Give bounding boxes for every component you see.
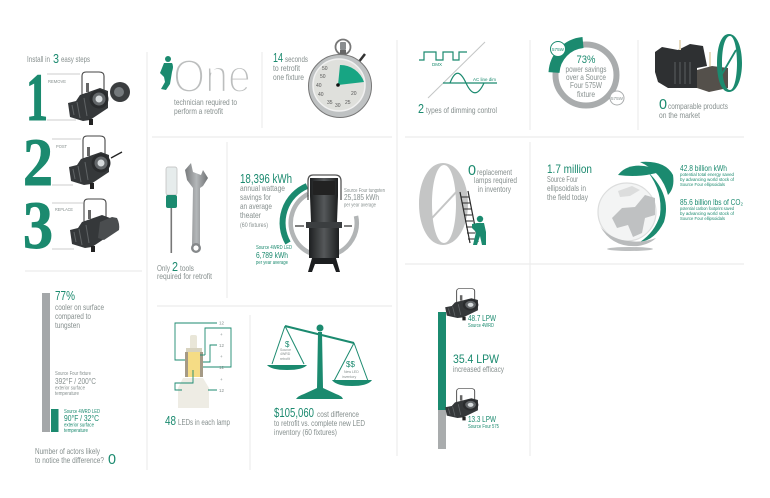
panel: 48 LEDs [165, 320, 231, 428]
text: number of actors: 0 [108, 451, 116, 468]
text: 0 comparable: on the market [659, 110, 700, 120]
text: 73 percent: power savings [566, 64, 606, 74]
chart: dimming waves: AC line dim [473, 77, 496, 82]
panel: surface temperature [35, 288, 116, 468]
text: 18,396 kWh: theater [240, 210, 261, 220]
text: LED usage: 6,789 kWh [256, 250, 288, 260]
text: 1.7 million: 1.7 million [547, 162, 592, 176]
text: 13.3 LPW [468, 414, 499, 430]
text: 105,060 [274, 405, 365, 437]
text: 1.7 million: the field today [547, 192, 589, 202]
icon: stopwatch: 40 [318, 92, 324, 98]
text: carbon saved [680, 197, 743, 221]
icon: ladder and worker [460, 191, 486, 245]
step 3 replace: 3 [23, 187, 53, 263]
heading: install in 3 easy steps: easy steps [61, 54, 90, 64]
text: 77 percent cooler: 77% [55, 288, 75, 303]
icon: globe with leaves [598, 162, 673, 251]
text: carbon saved: 85.6 billion lbs of CO₂ [680, 197, 743, 207]
image: lower fixture [445, 389, 478, 420]
icon: balance scale: 4WRD [280, 352, 291, 356]
text: energy saved: 42.8 billion kWh [680, 163, 727, 173]
icon: green slashed zero [717, 34, 742, 92]
text: 73 percent: over a Source [566, 72, 606, 82]
diagram: LED lamp wiring: 12 [219, 343, 225, 348]
text: 0 replacement [468, 162, 517, 194]
image: upper fixture [445, 289, 478, 320]
text: LED usage: per year average [256, 260, 288, 266]
text: LED usage: Source 4WRD LED [256, 245, 292, 251]
chart: power ring: 575W [611, 96, 624, 101]
text: 14 seconds: 14 [273, 50, 283, 65]
text: 0 replacement: replacement [477, 167, 512, 177]
icon: stopwatch: 50 [322, 66, 328, 72]
text: carbon saved: potential carbon footprint saved [680, 206, 734, 211]
text: number of actors: Number of actors likely [35, 446, 101, 456]
text: 2 types: types of dimming control [426, 105, 497, 115]
panel: two tools [157, 163, 212, 281]
step 2 post [23, 124, 122, 200]
heading: install in 3 easy steps: Install in [27, 54, 50, 64]
icon: balance scale: $ [285, 340, 290, 349]
text: 14 seconds: to retrofit [273, 63, 301, 73]
text: only 2 tools: required for retrofit [157, 271, 212, 281]
diagram: LED lamp wiring: + [220, 377, 223, 382]
text: 1.7 million [547, 162, 592, 202]
image: fixture rear view [295, 175, 352, 272]
text: Source Four temperature: exterior surface [55, 386, 85, 392]
text: 1.7 million: ellipsoidals in [547, 183, 586, 193]
panel: efficacy [438, 289, 505, 449]
step 1 remove: REMOVE [48, 79, 66, 84]
icon: balance scale: Source [280, 348, 291, 352]
text: tungsten usage: Source Four tungsten [344, 188, 385, 194]
image: LED modules [655, 40, 728, 92]
text: 0 comparable: comparable products [668, 101, 728, 111]
text: energy saved [680, 163, 735, 187]
text: Source 4WRD temperature: Source 4WRD LED [64, 409, 100, 415]
chart: dimming waves: DMX [432, 62, 442, 67]
text: Source Four temperature: Source Four fixture [55, 371, 91, 377]
bar chart: LPW bar [438, 312, 446, 449]
icon: stopwatch: 50 [320, 74, 326, 80]
text: 105,060: to retrofit vs. complete new LED [274, 418, 365, 428]
icon: gray slashed zero [419, 163, 468, 245]
diagram: LED lamp wiring: 12 [219, 388, 225, 393]
text: 18,396 kWh [240, 171, 292, 229]
diagram: LED lamp wiring: 12 [219, 320, 225, 326]
text: 73 percent: fixture [577, 89, 595, 99]
text: technician required [174, 97, 237, 116]
icon: stopwatch: 40 [316, 83, 322, 89]
text: technician required: technician required to [174, 97, 237, 107]
text: 18,396 kWh: an average [240, 201, 272, 211]
chart: power ring: 575W [552, 47, 565, 52]
step 1 remove [26, 59, 130, 135]
text: energy saved: by advancing world stock of [680, 177, 735, 182]
text: only 2 tools [157, 259, 212, 281]
text: Source Four temperature: 392°F / 200°C [55, 377, 96, 386]
text: 13.3 LPW: Source Four 575 [468, 424, 499, 430]
panel: one technician [160, 50, 251, 116]
icon: balance scale: $$ [346, 360, 355, 369]
text: 14 seconds [273, 50, 308, 82]
text: Source 4WRD temperature: temperature [64, 428, 88, 434]
text: 0 comparable: 0 [659, 96, 667, 113]
text: 48.7 LPW [468, 313, 496, 329]
text: tungsten usage: per year average [344, 202, 376, 208]
diagram: LED lamp wiring [175, 320, 231, 408]
icon: technician figure [160, 56, 173, 90]
icon: balance scale: New LED [344, 370, 359, 374]
text: 2 types [418, 101, 497, 116]
icon: stopwatch: 25 [345, 100, 351, 106]
heading: install in 3 easy steps [27, 51, 90, 66]
text: 0 replacement: lamps required [474, 175, 517, 185]
text: 77 percent cooler: tungsten [55, 320, 80, 330]
text: energy saved: potential total energy saved [680, 172, 734, 177]
diagram: LED lamp wiring: 12 [219, 365, 225, 370]
text: 77 percent cooler [55, 288, 104, 330]
step 3 replace: REPLACE [55, 207, 73, 212]
icon: balance scale: inventory [342, 375, 356, 379]
panel: annual wattage savings [240, 171, 385, 272]
text: Source 4WRD temperature: 90°F / 32°C [64, 413, 99, 423]
big word One: One [173, 50, 251, 102]
panel: ellipsoidals in field [547, 162, 743, 251]
step 3 replace [23, 187, 119, 263]
icon: balance scale [267, 324, 372, 399]
panel: replacement lamps [419, 162, 517, 245]
text: 2 types: 2 [418, 101, 424, 116]
icon: stopwatch [308, 40, 372, 118]
text: 18,396 kWh: annual wattage [240, 183, 285, 193]
panel: cost difference [267, 324, 372, 437]
text: 105,060: inventory (60 fixtures) [274, 427, 337, 437]
text: technician required: perform a retrofit [174, 106, 223, 116]
text: carbon saved: by advancing world stock of [680, 211, 735, 216]
text: tungsten usage: 25,185 kWh [344, 193, 379, 202]
icon: stopwatch: 30 [335, 103, 341, 109]
text: 18,396 kWh: 18,396 kWh [240, 171, 292, 186]
diagram: LED lamp wiring: + [220, 354, 223, 359]
heading: install in 3 easy steps: 3 [53, 51, 59, 66]
text: 13.3 LPW: 13.3 LPW [468, 414, 496, 424]
text: 105,060: $105,060 [274, 405, 314, 420]
text: 73 percent [566, 54, 606, 99]
text: Source 4WRD temperature [64, 409, 100, 434]
text: Source Four temperature: temperature [55, 391, 79, 397]
text: Source Four temperature [55, 371, 96, 397]
text: 105,060: cost difference [317, 409, 359, 419]
bar chart: temperature bars [42, 293, 58, 432]
panel: comparable products [655, 34, 742, 120]
text: number of actors: to notice the difference? [35, 455, 104, 465]
text: only 2 tools: Only [157, 263, 171, 273]
text: 0 comparable [659, 96, 728, 120]
panel: 14 seconds [273, 40, 372, 118]
text: 1.7 million: Source Four [547, 174, 578, 184]
text: 35.4 LPW: 35.4 LPW [453, 352, 500, 366]
icon: balance scale: retrofit [280, 357, 290, 361]
step 1 remove: 1 [26, 59, 48, 135]
text: 48 LEDs: 48 [165, 413, 176, 428]
text: number of actors [35, 446, 116, 468]
text: 73 percent: Four 575W [570, 80, 602, 90]
text: 35.4 LPW [453, 352, 505, 374]
text: 77 percent cooler: compared to [55, 311, 91, 321]
text: 0 replacement: 0 [468, 162, 476, 179]
panel: dimming control [418, 42, 497, 116]
text: 35.4 LPW: increased efficacy [453, 364, 505, 374]
text: 14 seconds: one fixture [273, 72, 304, 82]
panel: install steps [23, 51, 130, 263]
icon: stopwatch: 20 [351, 91, 357, 97]
text: Source 4WRD temperature: exterior surface [64, 422, 94, 428]
text: 48 LEDs: LEDs in each lamp [178, 417, 230, 427]
text: 14 seconds: seconds [285, 54, 308, 64]
icon: stopwatch: 35 [327, 100, 333, 106]
diagram: LED lamp wiring: + [220, 332, 223, 337]
text: 18,396 kWh: (60 fixtures) [240, 223, 268, 229]
text: 18,396 kWh: savings for [240, 192, 271, 202]
text: energy saved: Source Four ellipsoidals [680, 182, 726, 187]
chart: wattage ring [283, 186, 357, 256]
text: 77 percent cooler: cooler on surface [55, 302, 104, 312]
text: tungsten usage [344, 188, 385, 208]
chart: power ring [550, 42, 624, 106]
text: 48.7 LPW: 48.7 LPW [468, 313, 496, 323]
step 2 post: POST [56, 144, 67, 149]
text: only 2 tools: tools [180, 263, 194, 273]
icon: screwdriver [166, 167, 177, 253]
step 2 post: 2 [23, 124, 53, 200]
icon: wrench [185, 163, 208, 252]
panel: power savings [550, 42, 624, 106]
text: 73 percent: 73% [576, 54, 596, 66]
chart: dimming waves [419, 42, 497, 98]
text: LED usage [256, 245, 292, 266]
text: only 2 tools: 2 [172, 259, 178, 274]
text: 48 LEDs [165, 413, 230, 428]
text: 0 replacement: in inventory [478, 184, 512, 194]
text: carbon saved: Source Four ellipsoidals [680, 216, 726, 221]
text: 48.7 LPW: Source 4WRD [468, 323, 494, 329]
